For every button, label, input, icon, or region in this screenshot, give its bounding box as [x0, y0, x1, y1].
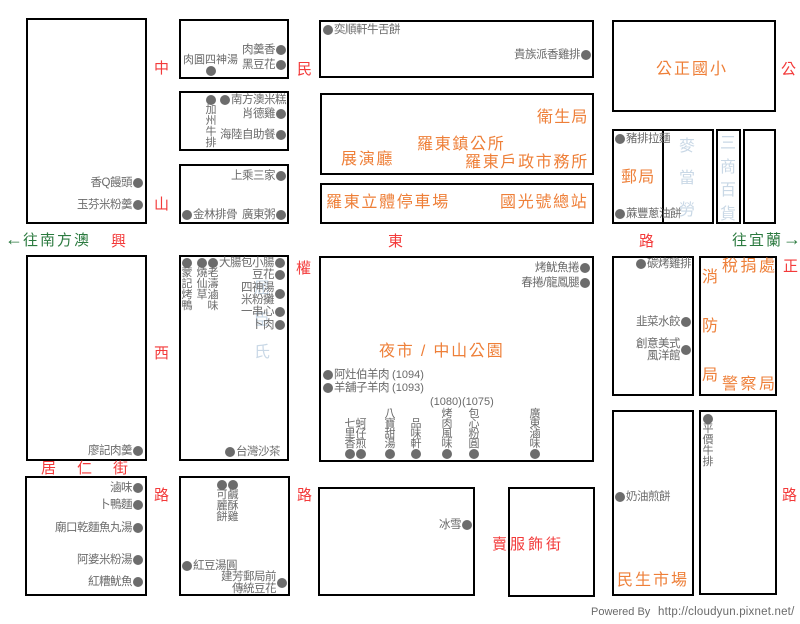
- road label: 公: 公: [781, 61, 798, 78]
- panel: top center block: [319, 20, 594, 78]
- stall: 建芳郵局前傳統豆花: [221, 571, 288, 595]
- panel: left block top: [26, 18, 147, 224]
- stall: 廣東滷味: 滷: [530, 428, 540, 440]
- panel: east block middle: [612, 256, 694, 396]
- stall: 春捲/龍鳳腿: 春捲/龍鳳腿: [521, 277, 579, 289]
- road label: 賣服飾街: 賣服飾街: [492, 536, 564, 553]
- stall: 蚵仔煎: 煎: [356, 438, 366, 450]
- panel: night market and Zhongshan park: [319, 256, 594, 462]
- stall: 上乘三家: 上乘三家: [231, 170, 275, 182]
- stall: 蚵仔煎: 仔: [356, 428, 366, 440]
- landmark: 民生市場: 民生市場: [617, 572, 689, 589]
- stall: 平價牛排: 平: [702, 423, 714, 435]
- stall: 卜肉: 卜肉: [252, 319, 274, 331]
- stall: 八寶甜湯: [384, 408, 396, 459]
- panel: block north 3: [179, 164, 289, 224]
- stall: 羊舖子羊肉: 羊舖子羊肉: [334, 382, 389, 394]
- stall: 平價牛排: 價: [702, 434, 714, 446]
- stall: 品味軒: 軒: [410, 438, 422, 450]
- stall: 平價牛排: [702, 414, 714, 468]
- text: (1075): [462, 396, 494, 408]
- stall: 七里香: 香: [344, 438, 356, 450]
- stall: 包心粉圓: 心: [468, 418, 480, 430]
- footer credit: http://cloudyun.pixnet.net/: [658, 606, 794, 618]
- stall: 廣東滷味: 廣: [530, 408, 540, 420]
- landmark: 國光號總站: 國光號總站: [500, 194, 589, 211]
- stall: 金林排骨: 金林排骨: [193, 209, 237, 221]
- landmark: 警察局: 警察局: [722, 376, 778, 393]
- road label: 正: 正: [783, 258, 800, 275]
- landmark: 屈臣氏: 氏: [254, 344, 270, 361]
- stall: 老濤滷味: [208, 258, 218, 312]
- stall: 品味軒: 味: [410, 428, 422, 440]
- stall: 蚵仔煎: [356, 418, 366, 459]
- road label: 權: 權: [296, 260, 313, 277]
- stall: 品味軒: [410, 418, 422, 459]
- stall: 紅豆湯圓: 紅豆湯圓: [193, 560, 237, 572]
- stall: 四神湯 米粉攤: 四神湯: [241, 282, 274, 294]
- stall: 創意美式 風洋館: 創意美式: [636, 338, 680, 350]
- stall: 燒仙草: [196, 258, 208, 301]
- stall: 烤魷魚捲: 烤魷魚捲: [535, 262, 579, 274]
- stall: 肖德雞: [242, 107, 286, 120]
- panel: block north 1: [179, 19, 289, 79]
- landmark: 麥當勞: [679, 137, 695, 219]
- stall: 肖德雞: 肖德雞: [242, 108, 275, 120]
- stall: 創意美式 風洋館: 風洋館: [647, 350, 680, 362]
- stall: 韭菜水餃: 韭菜水餃: [636, 316, 680, 328]
- panel: post office block: [612, 129, 714, 224]
- landmark: 羅東鎮公所: 羅東鎮公所: [417, 136, 506, 153]
- panel: fire and police block: [699, 256, 777, 396]
- stall: 建芳郵局前傳統豆花: 傳統豆花: [232, 583, 276, 595]
- stall: 加州牛排: 州: [206, 115, 216, 127]
- landmark: 屈臣氏: 屈: [254, 280, 270, 297]
- stall: 奶油煎餅: 奶油煎餅: [626, 491, 670, 503]
- stall: 烤肉風味: 味: [442, 438, 452, 450]
- stall: 加州牛排: 牛: [206, 126, 216, 138]
- stall: 紅糟魷魚: 紅糟魷魚: [88, 576, 132, 588]
- road label: 民: 民: [297, 61, 314, 78]
- stall: 一串心: [241, 305, 285, 318]
- panel: Quanmin block: [179, 255, 289, 461]
- stall: 奕順軒牛舌餅: 奕順軒牛舌餅: [334, 24, 400, 36]
- footer credit: [591, 606, 794, 618]
- panel: McDonald's divider block: [662, 129, 714, 224]
- stall: 可麗餅: 麗: [216, 500, 228, 512]
- stall: 一串心: 一串心: [241, 306, 274, 318]
- panel: township office block: [320, 93, 594, 175]
- landmark: 三商百貨: 商: [720, 158, 736, 176]
- stall: 八寶甜湯: 寶: [384, 418, 396, 430]
- stall: 包心粉圓: 包: [468, 408, 480, 420]
- stall: 老濤滷味: 老: [208, 267, 218, 279]
- landmark: 展演廳: 展演廳: [341, 151, 394, 168]
- footer credit: Powered By: [591, 606, 650, 618]
- stall: 卜鴨麵: 卜鴨麵: [99, 499, 132, 511]
- stall: 品味軒: 品: [410, 418, 422, 430]
- road label: 興: 興: [111, 233, 128, 250]
- landmark: 羅東立體停車場: 羅東立體停車場: [326, 194, 450, 211]
- stall: 豆花: [252, 268, 285, 281]
- stall: 烤肉風味: [441, 409, 453, 459]
- landmark: 屈臣氏: 臣: [254, 312, 270, 329]
- stall: 鹹酥雞: [227, 480, 239, 523]
- stall: 蒙記烤鴨: 記: [182, 278, 192, 290]
- road label: 路 center: 路: [297, 487, 314, 504]
- stall: 豆花: 豆花: [252, 269, 274, 281]
- stall: 廣東滷味: [529, 409, 541, 459]
- stall: 黑豆花: 黑豆花: [242, 59, 275, 71]
- stall: 四神湯 米粉攤: [241, 281, 285, 306]
- stall: 燒仙草: 仙: [196, 278, 208, 290]
- stall: 老濤滷味: 滷: [208, 289, 218, 301]
- stall: 卜肉: [252, 318, 285, 331]
- stall: 阿婆米粉湯: 阿婆米粉湯: [77, 554, 132, 566]
- stall: 台灣沙茶: 台灣沙茶: [236, 446, 280, 458]
- road label: 路: 路: [639, 233, 656, 250]
- stall: 八寶甜湯: 湯: [384, 438, 396, 450]
- stall: 蒙記烤鴨: 鴨: [182, 300, 192, 312]
- panel: Gongzheng elementary school: [612, 20, 776, 112]
- stall: 包心粉圓: [468, 409, 480, 459]
- landmark: 消防局: 防: [702, 318, 718, 335]
- panel: south block clothing street: [508, 487, 595, 597]
- stall: 老濤滷味: 味: [208, 300, 218, 312]
- stall: 蒙記烤鴨: 烤: [182, 289, 192, 301]
- stall: 蔴豐蔥油餅: 蔴豐蔥油餅: [626, 208, 681, 220]
- stall: 廣東滷味: 東: [530, 418, 540, 430]
- stall: 蒙記烤鴨: 蒙: [182, 267, 192, 279]
- stall: 建芳郵局前傳統豆花: 建芳郵局前: [221, 571, 276, 583]
- stall: 蚵仔煎: 蚵: [356, 418, 366, 430]
- landmark: 郵局: 郵局: [621, 169, 655, 186]
- stall: 可麗餅: [216, 480, 228, 523]
- stall: 阿灶伯羊肉: [323, 368, 424, 381]
- stall: 廣東粥: 廣東粥: [242, 209, 275, 221]
- panel: left block bottom: [25, 476, 147, 596]
- stall: 黑豆花: [242, 58, 286, 71]
- stall: 平價牛排: 牛: [702, 445, 714, 457]
- landmark: 三商百貨: 三: [720, 135, 736, 152]
- stall: 烤肉風味: 烤: [442, 408, 452, 420]
- stall: 廣東粥: [242, 208, 286, 221]
- stall: 八寶甜湯: 八: [384, 408, 396, 420]
- stall: 冰雪: [439, 519, 473, 531]
- landmark: 公正國小: 公正國小: [656, 61, 728, 78]
- stall: 碳烤雞排: 碳烤雞排: [647, 258, 691, 270]
- road label: 居: 居: [41, 460, 58, 477]
- panel: block north 2: [179, 91, 289, 151]
- landmark: 屈臣氏: [254, 280, 270, 361]
- stall: 包心粉圓: 圓: [468, 438, 480, 450]
- road label: 仁: 仁: [77, 460, 94, 477]
- stall: 肉圓四神湯: 肉圓四神湯: [183, 54, 238, 66]
- landmark: 麥當勞: 勞: [679, 202, 695, 219]
- stall: 八寶甜湯: 甜: [384, 428, 396, 440]
- panel: south block west: [179, 476, 290, 596]
- stall: 肉圓四神湯: [183, 54, 238, 76]
- stall: 廟口乾麵魚丸湯: 廟口乾麵魚丸湯: [55, 522, 132, 534]
- stall: 加州牛排: [206, 95, 216, 149]
- panel: stadium parking block: [320, 183, 594, 224]
- stall: 創意美式 風洋館: [636, 338, 692, 362]
- stall: 可麗餅: 餅: [216, 511, 228, 523]
- stall: 老濤滷味: 濤: [208, 278, 218, 290]
- landmark: 三商百貨: 百: [720, 182, 736, 199]
- stall: 阿灶伯羊肉: (1094): [392, 369, 424, 381]
- stall: 七里香: [344, 418, 356, 459]
- road label: 中: 中: [154, 60, 171, 77]
- stall: 廣東滷味: 味: [530, 438, 540, 450]
- panel: department store block: [716, 129, 741, 224]
- stall: 滷味: [110, 482, 144, 494]
- landmark: 消防局: 局: [702, 367, 718, 384]
- panel: narrow east block: [743, 129, 776, 224]
- road label: 東: 東: [388, 233, 405, 250]
- stall: 鹹酥雞: 鹹: [228, 489, 238, 501]
- road label: 西: 西: [154, 345, 171, 362]
- stall: 香Q饅頭: 香Q饅頭: [91, 177, 132, 189]
- stall: 蒙記烤鴨: [182, 258, 192, 312]
- stall: 海陸自助餐: 海陸自助餐: [220, 129, 275, 141]
- stall: 貴族派香雞排: 貴族派香雞排: [514, 49, 580, 61]
- landmark: 稅捐處: 稅捐處: [722, 258, 778, 275]
- stall: 烤肉風味: 風: [442, 428, 452, 440]
- stall: 豬排拉麵: 豬排拉麵: [626, 133, 670, 145]
- landmark: 三商百貨: 貨: [720, 206, 736, 222]
- landmark: 麥當勞: 麥: [679, 138, 695, 155]
- landmark: 衛生局: 衛生局: [537, 109, 589, 126]
- stall: 阿灶伯羊肉: 阿灶伯羊肉: [334, 369, 389, 381]
- stall: 包心粉圓: 粉: [468, 428, 480, 440]
- landmark: 夜市 / 中山公園: 夜市 / 中山公園: [379, 343, 505, 360]
- direction: to Yilan: 往宜蘭→: [732, 229, 800, 249]
- panel: left block middle: [26, 255, 147, 461]
- stall: 鹹酥雞: 酥: [228, 500, 238, 512]
- stall: 燒仙草: 燒: [196, 267, 208, 279]
- landmark: 消防局: 消: [702, 269, 718, 286]
- road label: 路 west: 路: [154, 487, 171, 504]
- direction: to Nanfang'ao: ←往南方澳: [5, 229, 91, 249]
- stall: 廖記肉羹: 廖記肉羹: [88, 445, 132, 457]
- stall: 滷味: 滷味: [110, 482, 132, 494]
- stall: 肉羹香: 肉羹香: [242, 44, 275, 56]
- landmark: 消防局: [702, 268, 718, 384]
- stall: 燒仙草: 草: [196, 289, 208, 301]
- stall: 冰雪: 冰雪: [439, 519, 461, 531]
- panel: south block center: [318, 487, 475, 596]
- stall: 鹹酥雞: 雞: [228, 511, 238, 523]
- stall: 加州牛排: 加: [206, 104, 216, 116]
- road label: 街: 街: [113, 460, 130, 477]
- stall: 南方澳米糕: 南方澳米糕: [231, 94, 286, 106]
- stall: 七里香: 里: [344, 428, 356, 440]
- stall: 羊舖子羊肉: [323, 381, 424, 394]
- stall: 羊舖子羊肉: (1093): [392, 382, 424, 394]
- panel: Minsheng market block: [612, 410, 694, 596]
- stall: 平價牛排: 排: [702, 456, 714, 468]
- landmark: 羅東戶政市務所: 羅東戶政市務所: [465, 154, 589, 171]
- road label: 山: 山: [154, 196, 171, 213]
- stall: 肉羹香: [242, 43, 286, 56]
- text: (1080): [430, 396, 462, 408]
- road label: 路 east: 路: [782, 487, 799, 504]
- stall: 七里香: 七: [344, 418, 356, 430]
- stall: 大腸包小腸: 大腸包小腸: [219, 257, 274, 269]
- landmark: 麥當勞: 當: [679, 170, 695, 187]
- stall: 四神湯 米粉攤: 米粉攤: [241, 294, 274, 306]
- stall: 玉芬米粉羹: 玉芬米粉羹: [77, 199, 132, 211]
- stall: 加州牛排: 排: [206, 137, 216, 149]
- stall: 烤肉風味: 肉: [442, 418, 452, 430]
- landmark: 三商百貨: [720, 135, 736, 222]
- stall: 可麗餅: 可: [216, 489, 228, 501]
- panel: steak block: [699, 410, 777, 595]
